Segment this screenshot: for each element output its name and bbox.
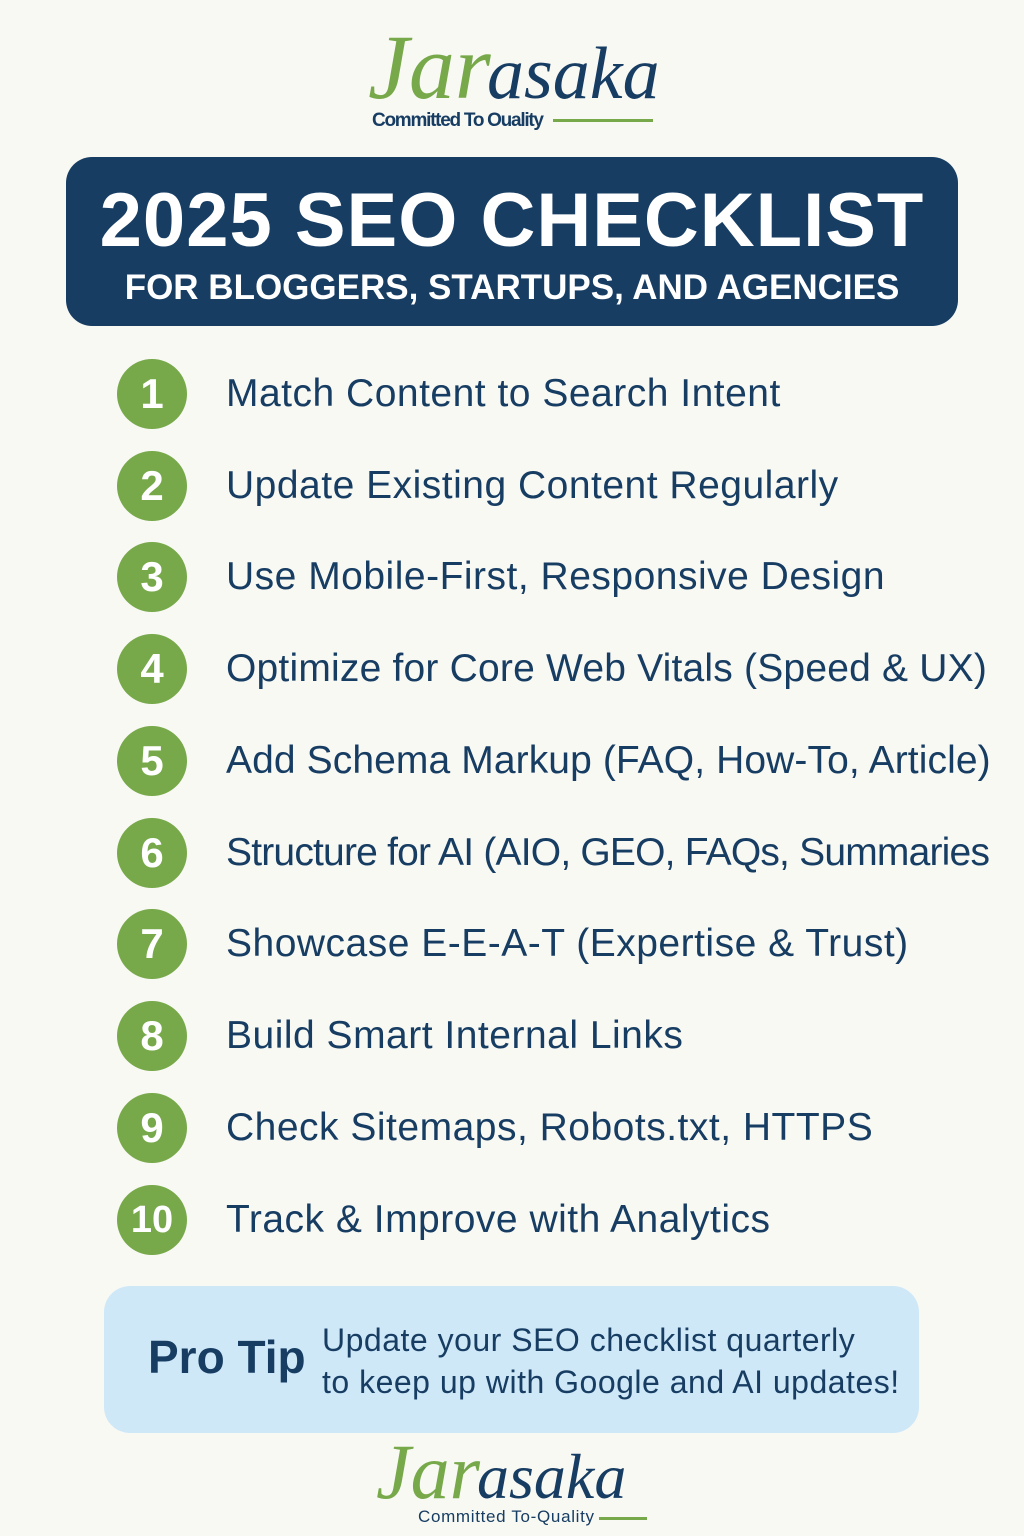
- item 7: 7: [140, 920, 164, 967]
- item 3: Use Mobile-First, Responsive Design: [226, 555, 885, 598]
- item 2: 2: [140, 462, 164, 509]
- logo: top: asaka: [487, 33, 660, 115]
- item 2: [117, 451, 839, 521]
- item 8: [117, 1001, 683, 1071]
- item 6: Structure for AI (AIO, GEO, FAQs, Summaries: [226, 831, 989, 874]
- item 8: Build Smart Internal Links: [226, 1014, 683, 1057]
- logo: top: Committed To Ouality: [372, 110, 544, 131]
- logo: top: Jar: [368, 18, 492, 118]
- item 9: Check Sitemaps, Robots.txt, HTTPS: [226, 1106, 873, 1149]
- item 10: [117, 1185, 771, 1255]
- title text: 2025 SEO CHECKLIST: [100, 178, 924, 263]
- item 5: 5: [140, 737, 164, 784]
- item 1: Match Content to Search Intent: [226, 372, 781, 415]
- item 3: 3: [140, 553, 164, 600]
- item 1: 1: [140, 370, 164, 417]
- item 8: 8: [140, 1012, 164, 1059]
- pro tip text: [322, 1322, 900, 1400]
- item 5: Add Schema Markup (FAQ, How-To, Article): [226, 739, 991, 782]
- item 1: [117, 359, 781, 429]
- pro tip label: Pro Tip: [148, 1331, 306, 1383]
- item 7: Showcase E-E-A-T (Expertise & Trust): [226, 922, 909, 965]
- subtitle: FOR BLOGGERS, STARTUPS, AND AGENCIES: [125, 268, 899, 307]
- item 4: Optimize for Core Web Vitals (Speed & UX): [226, 647, 987, 690]
- item 4: 4: [140, 645, 164, 692]
- item 10: 10: [131, 1199, 173, 1241]
- logo: footer: Jar: [376, 1428, 481, 1515]
- logo: footer: asaka: [477, 1441, 626, 1512]
- item 3: [117, 542, 885, 612]
- item 6: [117, 818, 989, 888]
- item 5: [117, 726, 991, 796]
- item 10: Track & Improve with Analytics: [226, 1198, 771, 1241]
- banner: title: [66, 157, 958, 326]
- logo: footer: [376, 1428, 647, 1526]
- item 4: [117, 634, 987, 704]
- pro tip callout: [104, 1286, 919, 1433]
- pro tip text: Update your SEO checklist quarterly: [322, 1322, 855, 1358]
- item 6: 6: [140, 829, 164, 876]
- pro tip text: to keep up with Google and AI updates!: [322, 1364, 900, 1400]
- logo: footer: Committed To-Quality: [418, 1507, 594, 1526]
- item 9: 9: [140, 1104, 164, 1151]
- item 9: [117, 1093, 873, 1163]
- item 7: [117, 909, 909, 979]
- logo: top: [368, 18, 660, 131]
- item 2: Update Existing Content Regularly: [226, 464, 839, 507]
